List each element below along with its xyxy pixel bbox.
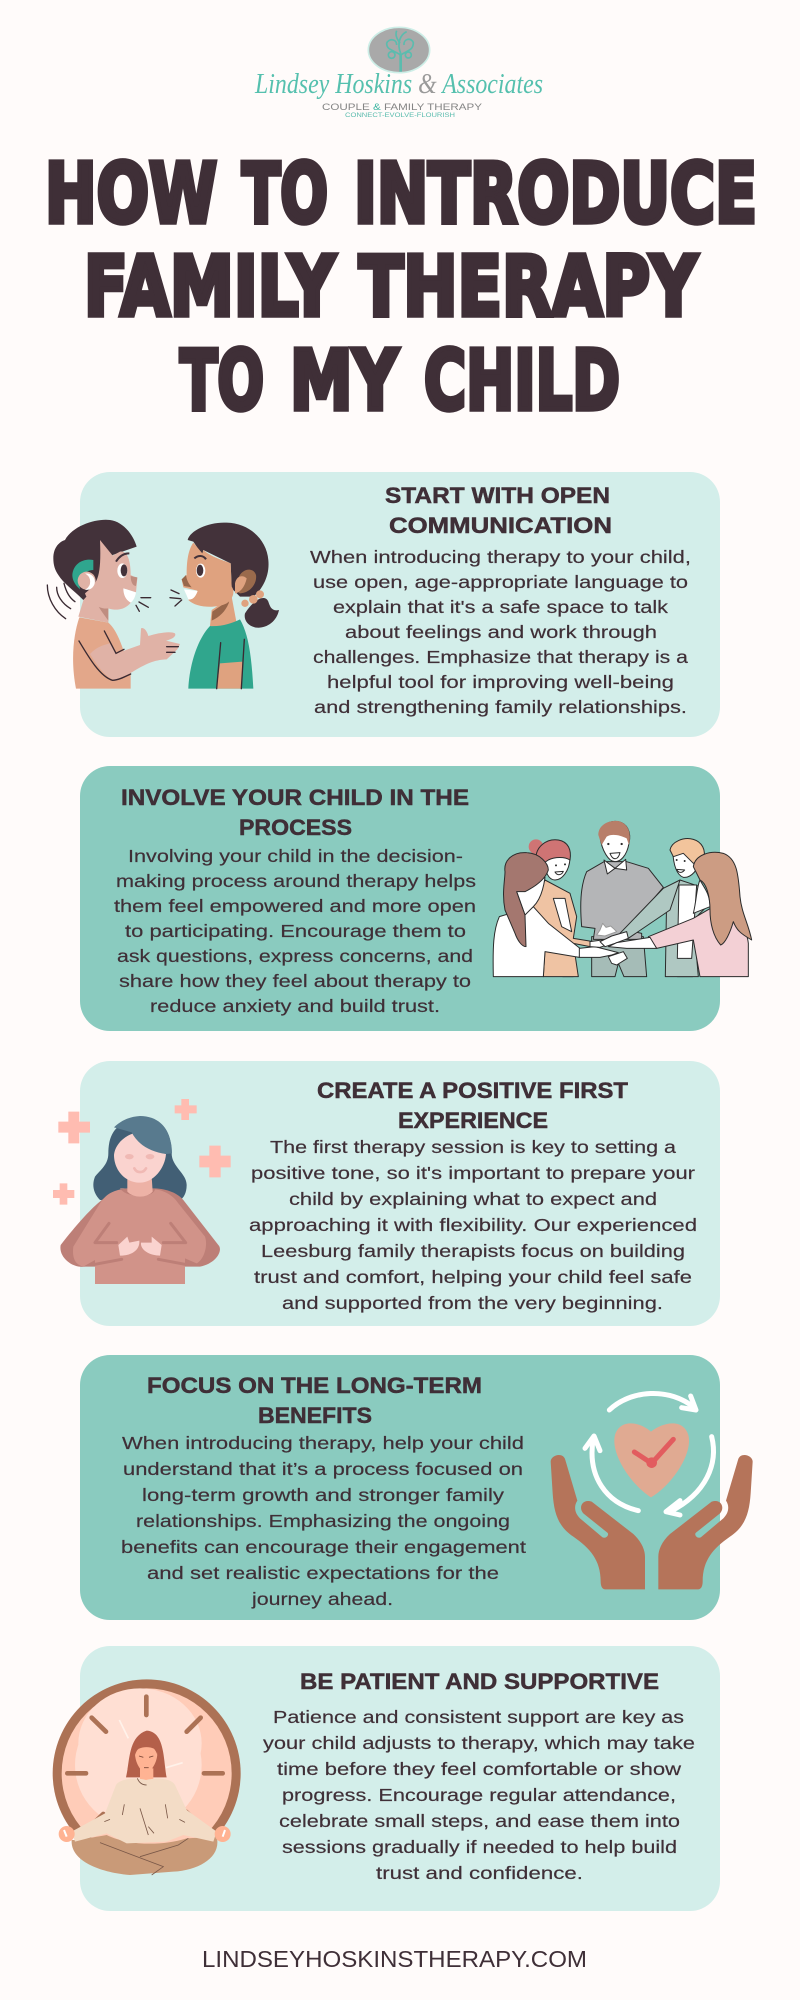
footer website: LINDSEYHOSKINSTHERAPY.COM: [202, 1946, 587, 1972]
title: THERAPY: [359, 240, 698, 335]
body text: [114, 846, 476, 1016]
body text: [249, 1137, 697, 1313]
left child: [47, 520, 180, 689]
body text: long-term growth and stronger family: [142, 1485, 504, 1505]
title: MY: [290, 334, 399, 429]
woman: [59, 1731, 231, 1875]
body text: Involving your child in the decision-: [128, 846, 463, 866]
body text: celebrate small steps, and ease them into: [279, 1811, 680, 1831]
body text: use open, age-appropriate language to: [313, 572, 688, 592]
woman in white, back view: [493, 853, 580, 977]
body text: challenges. Emphasize that therapy is a: [313, 647, 688, 667]
body text: explain that it's a safe space to talk: [333, 597, 668, 617]
title: TO: [180, 334, 264, 429]
body text: share how they feel about therapy to: [119, 971, 471, 991]
body text: and strengthening family relationships.: [314, 697, 687, 717]
body text: The first therapy session is key to setting a: [270, 1137, 676, 1157]
title: [45, 147, 757, 429]
body text: about feelings and work through: [345, 622, 657, 642]
body text: positive tone, so it's important to prepare your: [251, 1163, 695, 1183]
heading: CREATE A POSITIVE FIRST: [317, 1078, 628, 1103]
body text: sessions gradually if needed to help build: [282, 1837, 677, 1857]
body text: child by explaining what to expect and: [289, 1189, 657, 1209]
heading: BENEFITS: [258, 1403, 372, 1428]
body text: [263, 1707, 695, 1883]
body text: trust and confidence.: [376, 1863, 583, 1883]
heading: EXPERIENCE: [398, 1108, 548, 1133]
clock: [53, 1679, 241, 1867]
heading: START WITH OPEN: [385, 483, 610, 508]
man with blond hair: [620, 839, 710, 977]
icon: meditating woman with clock: [53, 1679, 241, 1875]
body text: When introducing therapy to your child,: [310, 547, 691, 567]
icon: two children talking: [47, 520, 279, 689]
woman in pink: [648, 852, 752, 977]
logo tagline: CONNECT-EVOLVE-FLOURISH: [345, 112, 455, 119]
body text: relationships. Emphasizing the ongoing: [136, 1511, 510, 1531]
body text: trust and comfort, helping your child feel safe: [254, 1267, 692, 1287]
body text: reduce anxiety and build trust.: [150, 996, 440, 1016]
logo wordmark: Lindsey Hoskins & Associates: [254, 69, 543, 100]
body text: ask questions, express concerns, and: [117, 946, 473, 966]
body text: progress. Encourage regular attendance,: [282, 1785, 676, 1805]
stacked hands: [579, 923, 657, 965]
body text: [121, 1433, 526, 1609]
title: TO: [242, 147, 328, 242]
body text: benefits can encourage their engagement: [121, 1537, 526, 1557]
body text: them feel empowered and more open: [114, 896, 476, 916]
heading: [121, 785, 469, 840]
body text: time before they feel comfortable or show: [277, 1759, 681, 1779]
panel: create a positive first experience: [53, 1061, 720, 1326]
body text: approaching it with flexibility. Our experienced: [249, 1215, 697, 1235]
panel: involve your child in the process: [80, 766, 752, 1031]
logo: [254, 27, 543, 119]
body text: helpful tool for improving well-being: [327, 672, 674, 692]
body text: your child adjusts to therapy, which may take: [263, 1733, 695, 1753]
panel: focus on the long-term benefits: [80, 1355, 753, 1620]
heading: COMMUNICATION: [389, 513, 612, 538]
body text: Patience and consistent support are key as: [273, 1707, 684, 1727]
title: CHILD: [424, 334, 620, 429]
heading: FOCUS ON THE LONG-TERM: [147, 1373, 482, 1398]
body text: [310, 547, 691, 717]
body text: understand that it’s a process focused on: [123, 1459, 523, 1479]
woman with red hair: [529, 839, 593, 977]
body text: to participating. Encourage them to: [125, 921, 466, 941]
heading: [385, 483, 612, 538]
heading: BE PATIENT AND SUPPORTIVE: [300, 1669, 659, 1694]
logo subtitle: COUPLE & FAMILY THERAPY: [322, 102, 482, 112]
heading: [317, 1078, 628, 1133]
panel: be patient and supportive: [53, 1646, 720, 1911]
title: FAMILY: [84, 240, 336, 335]
panel: start with open communication: [47, 472, 720, 737]
heading: PROCESS: [239, 815, 352, 840]
logo emblem: oval with tree: [368, 27, 430, 73]
icon: group of people joining hands: [493, 821, 752, 977]
icon: calm woman with plus signs: [53, 1099, 231, 1284]
center man: [581, 821, 663, 977]
heading: INVOLVE YOUR CHILD IN THE: [121, 785, 469, 810]
icon: hands holding heart clock: [551, 1393, 753, 1589]
title: HOW: [45, 147, 217, 242]
body text: and supported from the very beginning.: [282, 1293, 663, 1313]
body text: When introducing therapy, help your child: [122, 1433, 524, 1453]
body text: Leesburg family therapists focus on building: [261, 1241, 685, 1261]
plus signs: [53, 1099, 231, 1205]
body text: and set realistic expectations for the: [147, 1563, 499, 1583]
right child: [170, 523, 279, 689]
heading: [147, 1373, 482, 1428]
body text: making process around therapy helps: [116, 871, 476, 891]
body text: journey ahead.: [251, 1589, 393, 1609]
